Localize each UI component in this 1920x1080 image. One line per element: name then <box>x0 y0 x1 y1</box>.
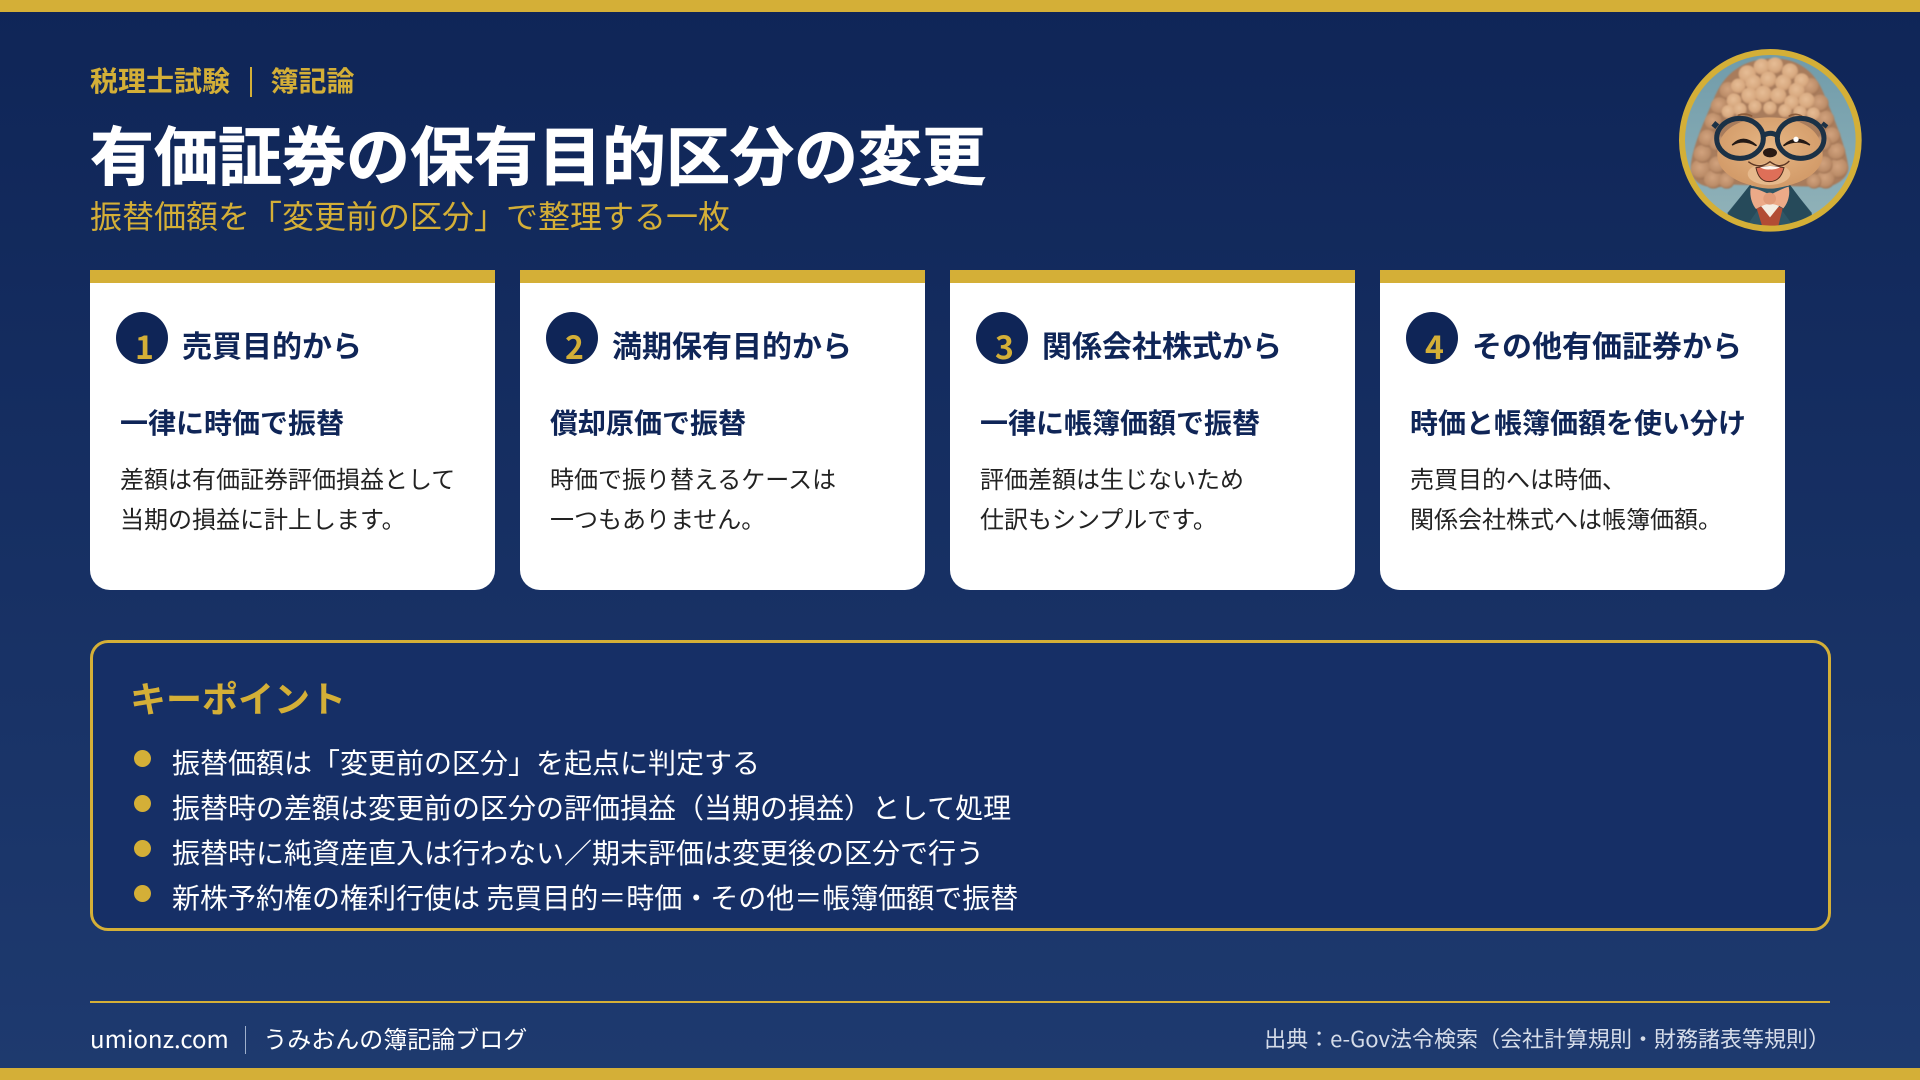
card 4 description <box>1410 460 1722 535</box>
card 4 <box>1380 270 1785 590</box>
card 4 description: 関係会社株式へは帳簿価額。 <box>1410 500 1722 535</box>
card 2 heading: 満期保有目的から <box>612 322 852 366</box>
card 1 description <box>120 460 455 535</box>
category label: 税理士試験 簿記論 <box>90 60 355 100</box>
card 4 conclusion: 時価と帳簿価額を使い分け <box>1410 402 1746 442</box>
card 3 description <box>980 460 1244 535</box>
bullet 1 <box>134 750 151 767</box>
number badge 2 <box>546 312 598 364</box>
card 2 <box>520 270 925 590</box>
point 4: 新株予約権の権利行使は 売買目的＝時価・その他＝帳簿価額で振替 <box>172 877 1018 917</box>
card 1 conclusion: 一律に時価で振替 <box>120 402 344 442</box>
number badge 4 <box>1406 312 1458 364</box>
bullet 3 <box>134 840 151 857</box>
card 3 heading: 関係会社株式から <box>1042 322 1282 366</box>
card 3 description: 仕訳もシンプルです。 <box>980 500 1217 535</box>
footer source: 出典：e-Gov法令検索（会社計算規則・財務諸表等規則） <box>1264 1022 1830 1054</box>
number badge 3 <box>976 312 1028 364</box>
subtitle: 振替価額を「変更前の区分」で整理する一枚 <box>90 192 730 238</box>
title: 有価証券の保有目的区分の変更 <box>90 107 986 199</box>
top gold bar <box>0 0 1920 12</box>
card 2 description <box>550 460 836 535</box>
point 2: 振替時の差額は変更前の区分の評価損益（当期の損益）として処理 <box>172 787 1011 827</box>
footer site name: umionz.com うみおんの簿記論ブログ <box>90 1020 527 1055</box>
card 1 heading: 売買目的から <box>182 322 362 366</box>
footer rule <box>90 1001 1830 1003</box>
avatar: poodle with glasses <box>1679 49 1862 232</box>
card 2 description: 時価で振り替えるケースは <box>550 460 836 495</box>
number badge 1 <box>116 312 168 364</box>
card 1 description: 当期の損益に計上します。 <box>120 500 406 535</box>
bullet 2 <box>134 795 151 812</box>
point 3: 振替時に純資産直入は行わない／期末評価は変更後の区分で行う <box>172 832 984 872</box>
card 3 description: 評価差額は生じないため <box>980 460 1244 495</box>
card 1 description: 差額は有価証券評価損益として <box>120 460 455 495</box>
panel: key points <box>90 640 1830 930</box>
card 2 description: 一つもありません。 <box>550 500 765 535</box>
point 1: 振替価額は「変更前の区分」を起点に判定する <box>172 742 760 782</box>
card 3 <box>950 270 1355 590</box>
bottom gold bar <box>0 1068 1920 1080</box>
card 3 conclusion: 一律に帳簿価額で振替 <box>980 402 1260 442</box>
card 2 conclusion: 償却原価で振替 <box>550 402 746 442</box>
card 4 heading: その他有価証券から <box>1472 322 1742 366</box>
bullet 4 <box>134 885 151 902</box>
key points heading: キーポイント <box>130 671 346 723</box>
card 1 <box>90 270 495 590</box>
card 4 description: 売買目的へは時価、 <box>1410 460 1626 495</box>
